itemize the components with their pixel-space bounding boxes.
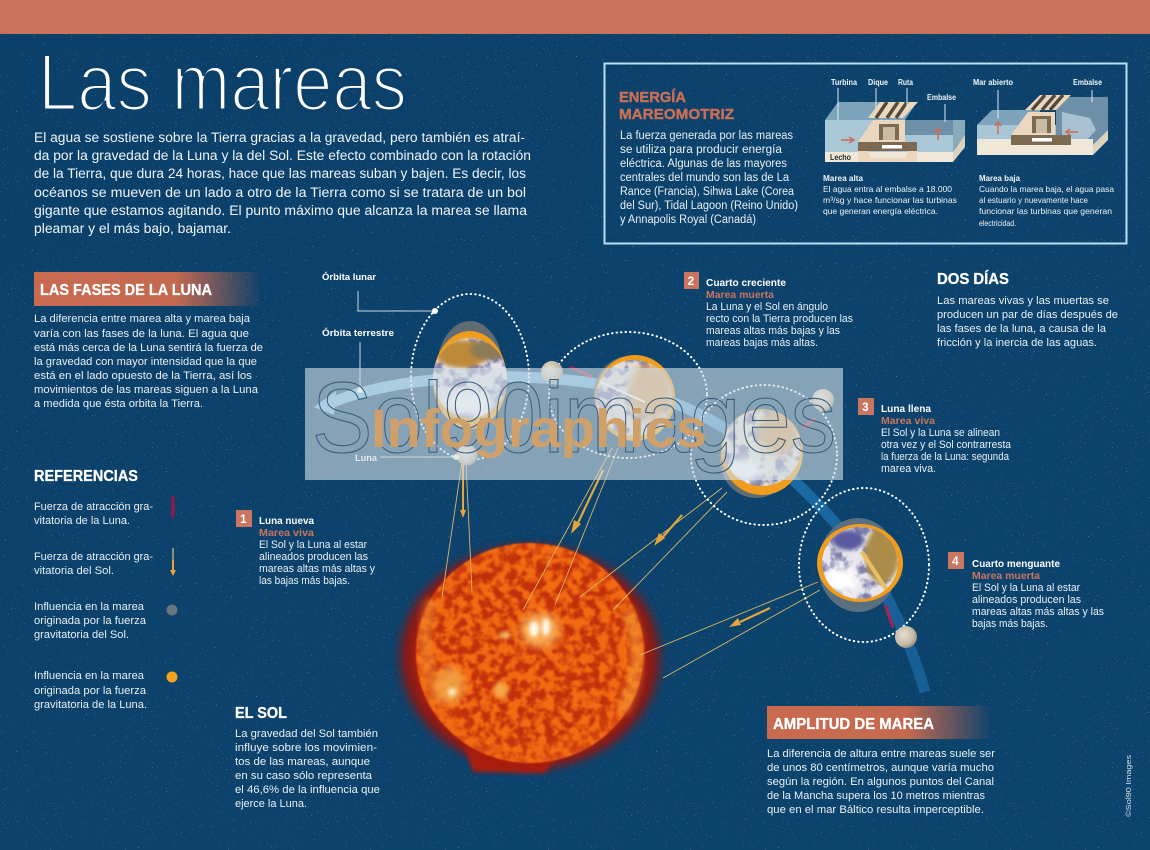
caption: marea alta: El agua entra al embalse a 18.000: [823, 184, 952, 194]
label: luna: [355, 453, 459, 464]
legend item: sun force: vitatoria del Sol.: [34, 565, 114, 577]
moon 2: [541, 361, 563, 383]
caption: marea alta: que generan energía eléctrica.: [823, 206, 938, 216]
heading bar: AMPLITUD DE MAREA: [773, 716, 934, 733]
amplitude text: [767, 748, 995, 816]
caption: marea baja: funcionar las turbinas que generan: [979, 206, 1112, 216]
phases text: La diferencia entre marea alta y marea baja: [34, 313, 251, 325]
caption: marea baja: Cuando la marea baja, el agua pasa: [979, 184, 1114, 194]
callout 3: luna llena: El Sol y la Luna se alinean: [881, 427, 1000, 439]
credit: ©Sol90 Images: [1125, 754, 1133, 817]
lunar orbit 3: [691, 385, 837, 525]
callout 1: luna nueva: Marea viva: [259, 527, 314, 539]
callout 2: cuarto creciente: Marea muerta: [706, 289, 774, 301]
earth phase 3: luna llena: [720, 408, 803, 498]
section: el sol: La gravedad del Sol también: [235, 728, 378, 740]
heading: energía mareomotriz: ENERGÍA: [619, 89, 686, 106]
label: órbita lunar: [322, 271, 438, 314]
diagram labels: Embalse: [927, 93, 956, 102]
legend item: sun force: Fuerza de atracción gra-: [34, 551, 153, 563]
label: órbita terrestre: [322, 327, 394, 393]
section: dos días: [937, 271, 1118, 349]
label: órbita lunar: Órbita lunar: [322, 271, 376, 283]
energy text: del Sur), Tidal Lagoon (Reino Unido): [620, 200, 798, 212]
section: amplitud de marea: [767, 706, 995, 816]
section: dos días: las fases de la luna, a causa de la: [937, 323, 1107, 335]
diagram labels: Ruta: [898, 78, 913, 87]
diagram labels: Embalse: [1073, 78, 1102, 87]
callout 1: luna nueva: las bajas más bajas.: [259, 575, 350, 587]
legend item: moon force: vitatoria de la Luna.: [34, 515, 130, 527]
energy text: y Annapolis Royal (Canadá): [620, 214, 756, 226]
energy text: eléctrica. Algunas de las mayores: [620, 158, 787, 170]
phases text: está en el lado opuesto de la Tierra, así los: [34, 370, 253, 382]
legend item: sun force: [34, 548, 176, 577]
watermark banner: Sol90images: [312, 362, 836, 474]
diagram labels: Mar abierto: [973, 78, 1013, 87]
legend item: sun tide influence: Influencia en la marea: [34, 601, 145, 613]
callout 3: luna llena: Luna llena: [881, 403, 931, 415]
section: las fases de la luna: [34, 272, 263, 410]
section: el sol: el 46,6% de la influencia que: [235, 784, 380, 796]
section: el sol: en su caso sólo representa: [235, 770, 373, 782]
callout 1: luna nueva: alineados producen las: [259, 551, 368, 563]
callout 3: luna llena: Marea viva: [881, 415, 935, 427]
top band: [0, 0, 1150, 34]
callout 2: cuarto creciente: [684, 272, 853, 349]
diagram: marea baja: [973, 78, 1108, 155]
callout 1: luna nueva: Luna nueva: [259, 515, 314, 527]
section: dos días: Las mareas vivas y las muertas se: [937, 295, 1109, 307]
legend item: sun tide influence: gravitatoria del Sol.: [34, 629, 129, 641]
caption: marea baja: [979, 174, 1114, 228]
phases text: la gravedad con mayor intensidad que la que: [34, 356, 257, 368]
callout 2: cuarto creciente: mareas altas más bajas y las: [706, 325, 840, 337]
callout 1: luna nueva: [236, 510, 375, 587]
intro text: gigante que estamos agitando. El punto máximo que alcanza la marea se llama: [34, 203, 527, 218]
earth phase 1: luna nueva: [430, 321, 510, 429]
title: Las mareas: [38, 38, 407, 128]
lunar orbit 2: [549, 332, 707, 458]
lunar orbit 1: [411, 294, 529, 460]
callout 4: cuarto menguante: alineados producen las: [972, 594, 1081, 606]
callout 3: luna llena: otra vez y el Sol contrarresta: [881, 439, 1012, 451]
intro text: [34, 130, 531, 236]
legend item: moon tide influence: Influencia en la marea: [34, 670, 145, 682]
diagram: marea alta: [825, 78, 965, 162]
legend item: moon force: Fuerza de atracción gra-: [34, 501, 153, 513]
section: el sol: [235, 705, 380, 810]
legend item: sun tide influence: [34, 601, 178, 641]
diagram labels: Lecho: [830, 153, 851, 162]
heading bar: [34, 272, 262, 306]
legend item: moon tide influence: [34, 670, 178, 711]
section: el sol: influye sobre los movimien-: [235, 742, 377, 754]
panel: energía mareomotriz: [604, 64, 1126, 244]
intro text: océanos se mueven de un lado a otro de la Tierra como si se tratara de un bol: [34, 185, 526, 200]
legend item: moon tide influence: gravitatoria de la Luna.: [34, 699, 147, 711]
callout 4: cuarto menguante: Marea muerta: [972, 570, 1040, 582]
earth phase 2: cuarto creciente: [594, 355, 675, 441]
callout 1: luna nueva: mareas altas más altas y: [259, 563, 375, 575]
arrows: sun force: [460, 462, 770, 627]
section: dos días: DOS DÍAS: [937, 271, 1009, 288]
callout 3: luna llena: marea viva.: [881, 463, 936, 475]
callout 4: cuarto menguante: bajas más bajas.: [972, 618, 1048, 630]
callout 4: cuarto menguante: Cuarto menguante: [972, 558, 1060, 570]
legend item: sun tide influence: originada por la fuerza: [34, 615, 147, 627]
diagram labels: Dique: [868, 78, 888, 87]
section: el sol: EL SOL: [235, 705, 287, 722]
callout 2: cuarto creciente: Cuarto creciente: [706, 277, 786, 289]
moon 4: [895, 626, 917, 648]
intro text: pleamar y el más bajo, bajamar.: [34, 221, 231, 236]
phases text: está más cerca de la Luna sentirá la fuerza de: [34, 342, 263, 354]
caption: marea baja: Marea baja: [979, 174, 1021, 183]
amplitude text: de la Mancha supera los 10 metros mientras: [767, 790, 985, 802]
energy text: Rance (Francia), Sihwa Lake (Corea: [620, 186, 795, 198]
callout 2: cuarto creciente: recto con la Tierra producen las: [706, 313, 853, 325]
phases text: varía con las fases de la luna. El agua que: [34, 328, 249, 340]
section: dos días: producen un par de días después de: [937, 309, 1118, 321]
callout 1: luna nueva: El Sol y la Luna al estar: [259, 539, 367, 551]
tide force lines to the sun: [442, 448, 820, 678]
lunar orbit 4: [799, 488, 929, 642]
legend item: moon tide influence: originada por la fuerza: [34, 685, 147, 697]
earth phase 4: cuarto menguante: [817, 518, 903, 612]
sun: [391, 537, 669, 777]
diagram labels: Turbina: [831, 78, 857, 87]
amplitude text: La diferencia de altura entre mareas suele ser: [767, 748, 995, 760]
caption: marea alta: m³/sg y hace funcionar las turbinas: [823, 195, 957, 205]
phases text: [34, 313, 263, 410]
diagram labels: [973, 78, 1102, 87]
arrow: orbit direction: [314, 391, 336, 415]
callout 3: luna llena: [858, 398, 1012, 475]
energy text: se utiliza para producir energía: [620, 144, 783, 156]
earth orbit band: [314, 377, 925, 692]
amplitude text: de unos 80 centímetros, aunque varía mucho: [767, 762, 994, 774]
moon 1: [456, 444, 478, 466]
callout 2: cuarto creciente: mareas bajas más altas.: [706, 337, 818, 349]
arrows: moon force: [570, 367, 893, 627]
caption: marea baja: al estuario y nuevamente hace: [979, 195, 1088, 205]
callout 3: luna llena: la fuerza de la Luna: segunda: [881, 451, 1010, 463]
energy text: La fuerza generada por las mareas: [620, 130, 793, 142]
heading bar: LAS FASES DE LA LUNA: [40, 282, 212, 299]
callout 3: luna llena: 3: [862, 400, 869, 414]
callout 4: cuarto menguante: mareas altas más altas y las: [972, 606, 1104, 618]
phases text: movimientos de las mareas siguen a la Luna: [34, 384, 259, 396]
watermark banner: Infographics: [371, 399, 707, 459]
caption: marea alta: Marea alta: [823, 174, 864, 183]
callout 4: cuarto menguante: El Sol y la Luna al estar: [972, 582, 1080, 594]
section: dos días: fricción y la inercia de las aguas.: [937, 337, 1097, 349]
legend item: moon force: [34, 496, 175, 527]
energy text: [620, 130, 798, 226]
callout 1: luna nueva: 1: [240, 512, 247, 526]
callout 4: cuarto menguante: [948, 552, 1104, 630]
diagram labels: [830, 78, 956, 162]
moon 3: [812, 389, 834, 411]
intro text: da por la gravedad de la Luna y la del Sol. Este efecto combinado con la rotación: [34, 148, 531, 163]
callout 4: cuarto menguante: 4: [952, 554, 959, 568]
caption: marea alta: [823, 174, 957, 216]
legend: referencias: [34, 468, 178, 711]
legend: referencias: REFERENCIAS: [34, 468, 138, 485]
callout 2: cuarto creciente: 2: [688, 274, 694, 288]
section: el sol: ejerce la Luna.: [235, 798, 307, 810]
label: luna: Luna: [355, 453, 378, 464]
heading: energía mareomotriz: MAREOMOTRIZ: [619, 106, 734, 123]
intro text: de la Tierra, que dura 24 horas, hace que las mareas suban y bajen. Es decir, los: [34, 166, 526, 181]
callout 2: cuarto creciente: La Luna y el Sol en ángulo: [706, 301, 828, 313]
label: órbita terrestre: Órbita terrestre: [322, 327, 394, 339]
energy text: centrales del mundo son las de La: [620, 172, 790, 184]
phases text: a medida que ésta orbita la Tierra.: [34, 398, 203, 410]
caption: marea baja: electricidad.: [979, 218, 1016, 228]
intro text: El agua se sostiene sobre la Tierra gracias a la gravedad, pero también es atraí-: [34, 130, 525, 145]
amplitude text: según la región. En algunos puntos del Canal: [767, 776, 994, 788]
heading bar: [767, 706, 993, 739]
amplitude text: que en el mar Báltico resulta imperceptible.: [767, 804, 984, 816]
heading: energía mareomotriz: [619, 89, 734, 123]
section: el sol: tos de las mareas, aunque: [235, 756, 370, 768]
